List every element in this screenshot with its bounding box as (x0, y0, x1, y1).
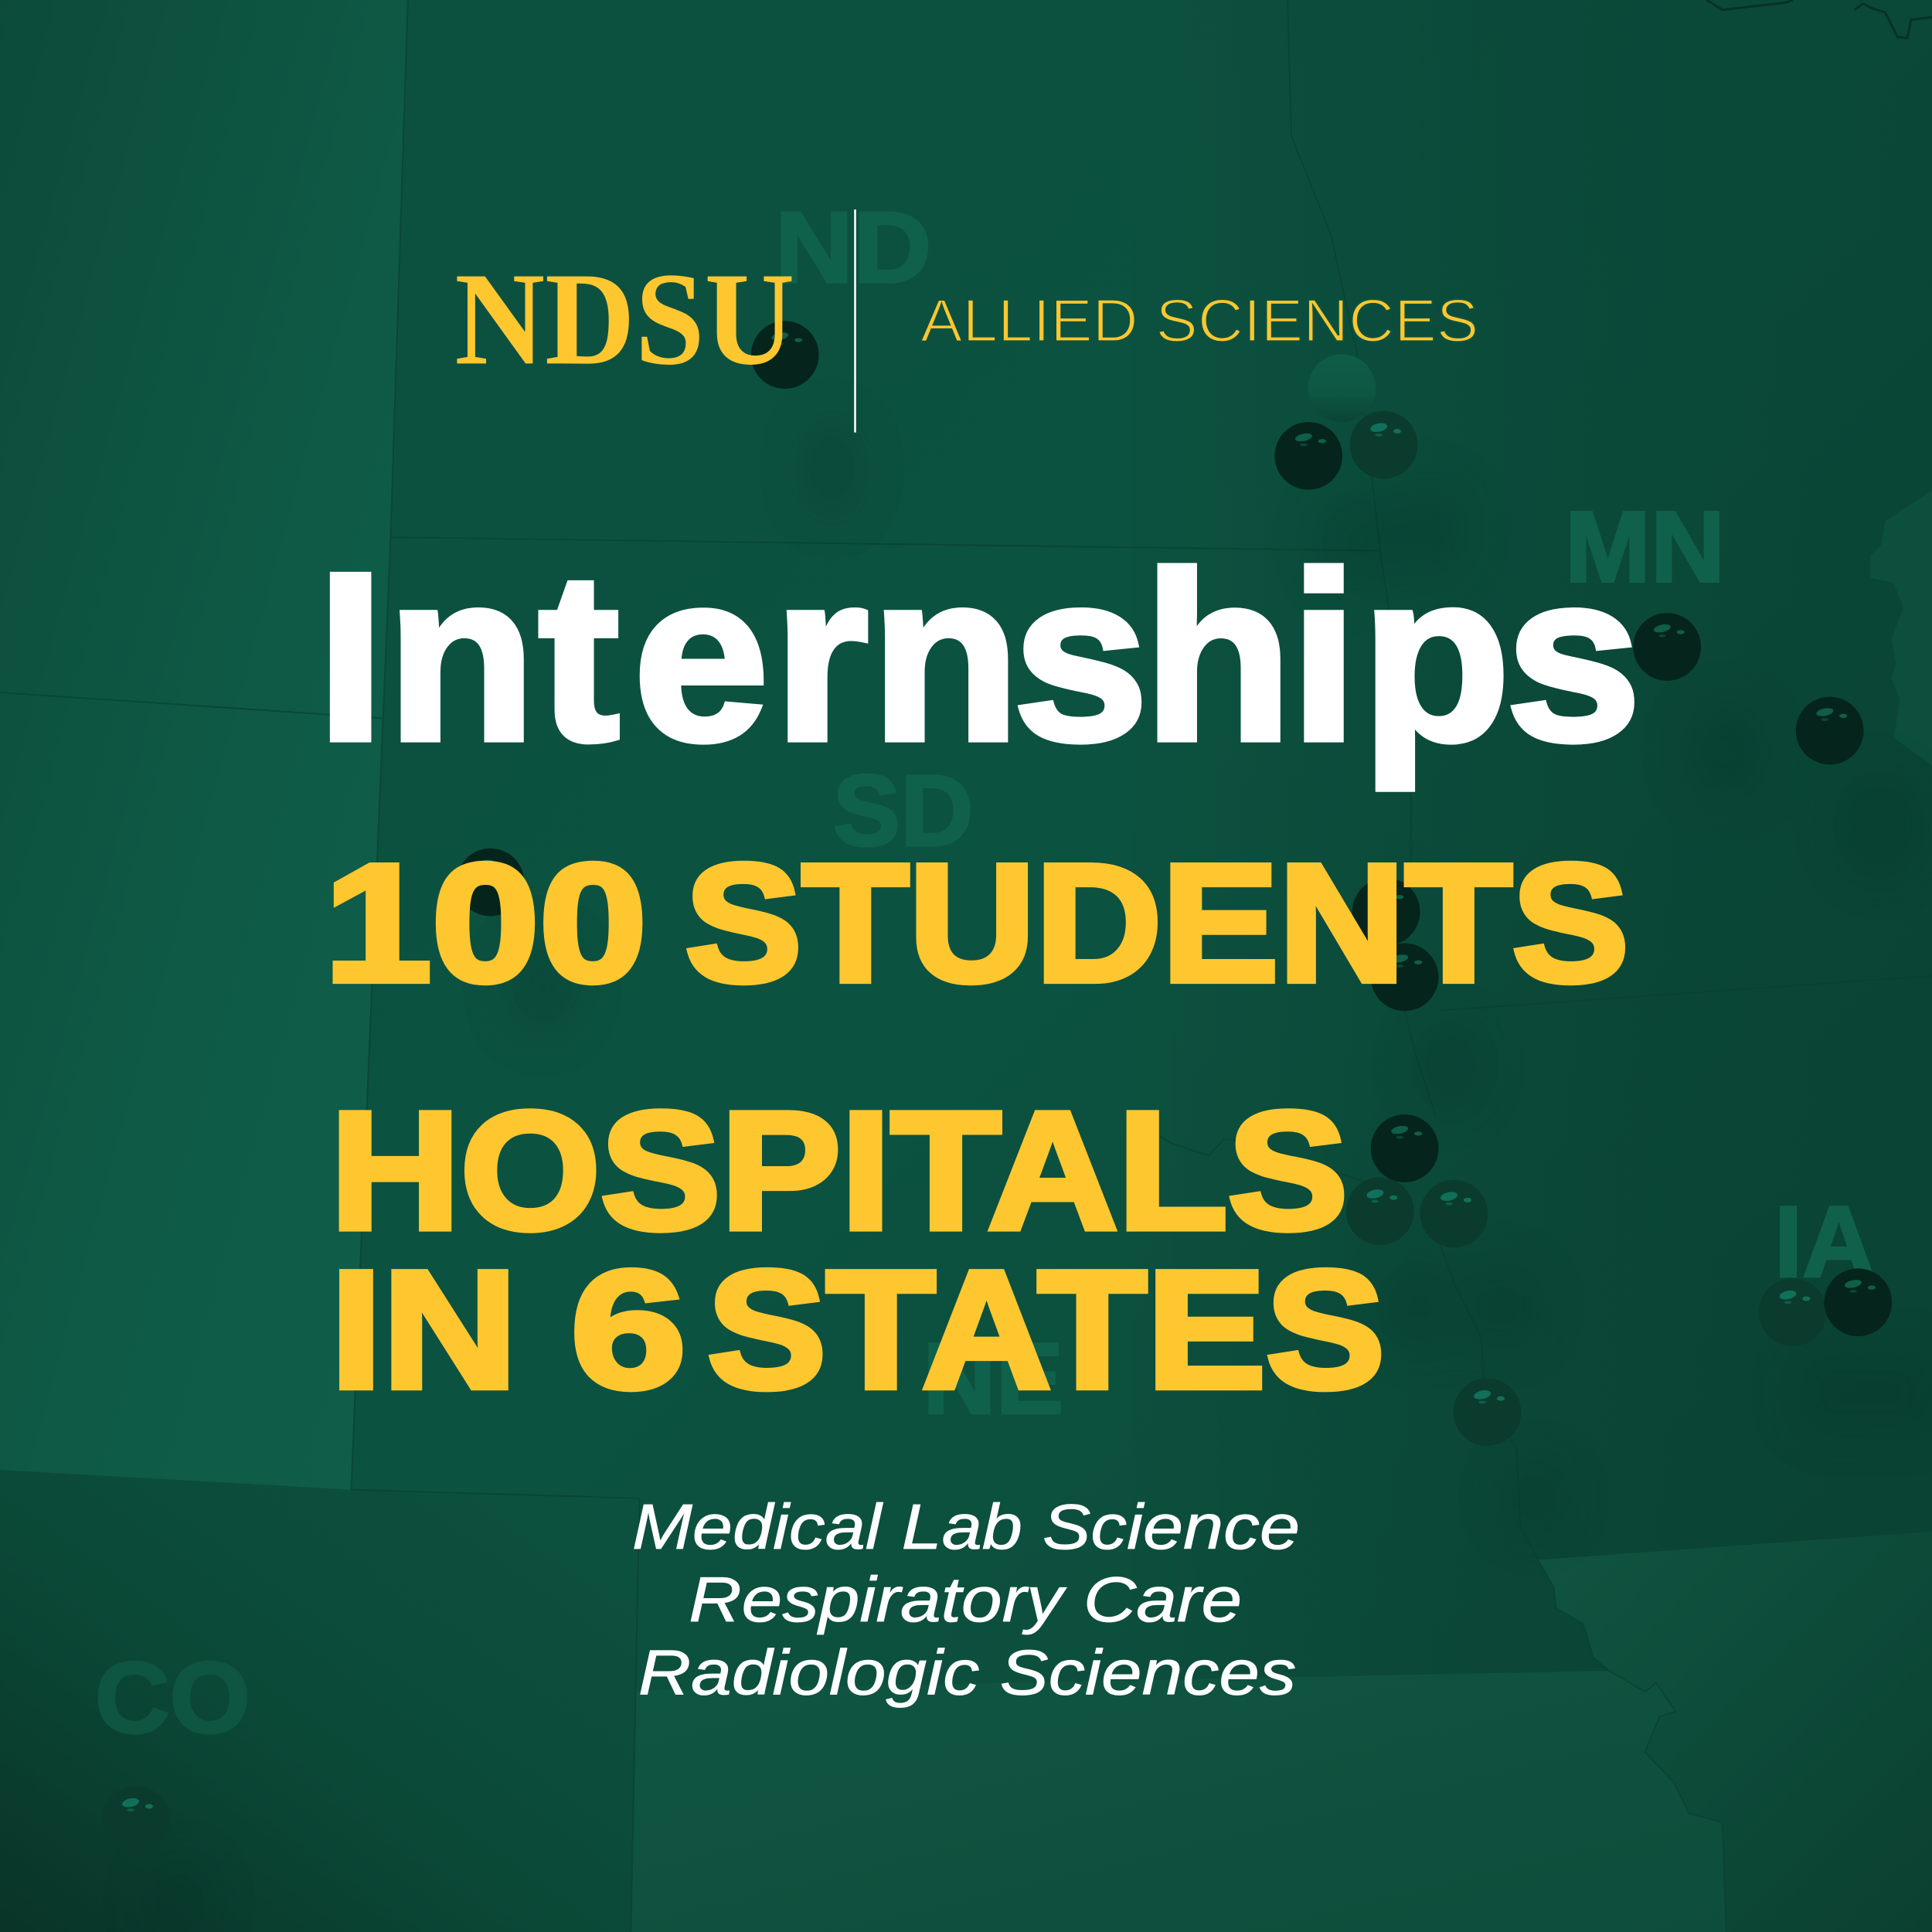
state region: Wisconsin edge (1870, 491, 1932, 765)
map pin shadows (147, 417, 1932, 1932)
line: in 6: IN (330, 1236, 518, 1423)
pin (1824, 1268, 1892, 1336)
NDSU logo lockup (454, 209, 1478, 433)
pin (1352, 878, 1420, 946)
pin (102, 1786, 169, 1854)
label SD: SD (833, 754, 974, 867)
label IA: IA (1774, 1185, 1876, 1298)
eastern shading (1109, 0, 1932, 1932)
state region: Missouri (1538, 1532, 1932, 1932)
line: hospitals: HOSPITALS (330, 1077, 1348, 1264)
pin (1346, 1177, 1414, 1245)
state labels on map (95, 191, 1876, 1754)
pin (1796, 697, 1864, 764)
pin (457, 849, 524, 916)
program: radiologic sciences: Radiologic Sciences (638, 1636, 1296, 1708)
map pins (102, 321, 1892, 1854)
pin (1371, 1114, 1438, 1182)
logo subtitle: ALLIED SCIENCES (920, 287, 1478, 355)
program: medical lab science: Medical Lab Science (632, 1491, 1300, 1563)
pin (1274, 422, 1342, 490)
pin (1371, 944, 1438, 1011)
pin (1633, 613, 1701, 681)
label ND: ND (775, 191, 931, 304)
pin (751, 321, 818, 389)
numeral 6: 6 (570, 1236, 686, 1423)
pin (1420, 1180, 1488, 1247)
state region: Colorado (0, 1470, 639, 1932)
label NE: NE (923, 1322, 1063, 1435)
title: Internships (317, 523, 1641, 791)
pin (1759, 1278, 1827, 1346)
state region: western states (0, 0, 408, 1490)
logo divider (854, 209, 856, 433)
headline: hospitals in 6 states (330, 1077, 1385, 1423)
pin (1350, 411, 1417, 478)
pin faded (1308, 354, 1376, 422)
count: 100: 100 (324, 829, 647, 1016)
logo wordmark NDSU: NDSU (454, 246, 794, 393)
word: students: STUDENTS (685, 829, 1629, 1016)
word: states: STATES (707, 1236, 1385, 1423)
program: respiratory care: Respiratory Care (689, 1563, 1242, 1635)
state region: Kansas (631, 1671, 1726, 1932)
label CO: CO (95, 1641, 250, 1754)
label MN: MN (1565, 491, 1725, 604)
headline: 100 students (324, 829, 1629, 1016)
pin (1454, 1378, 1521, 1446)
program list (632, 1491, 1300, 1708)
